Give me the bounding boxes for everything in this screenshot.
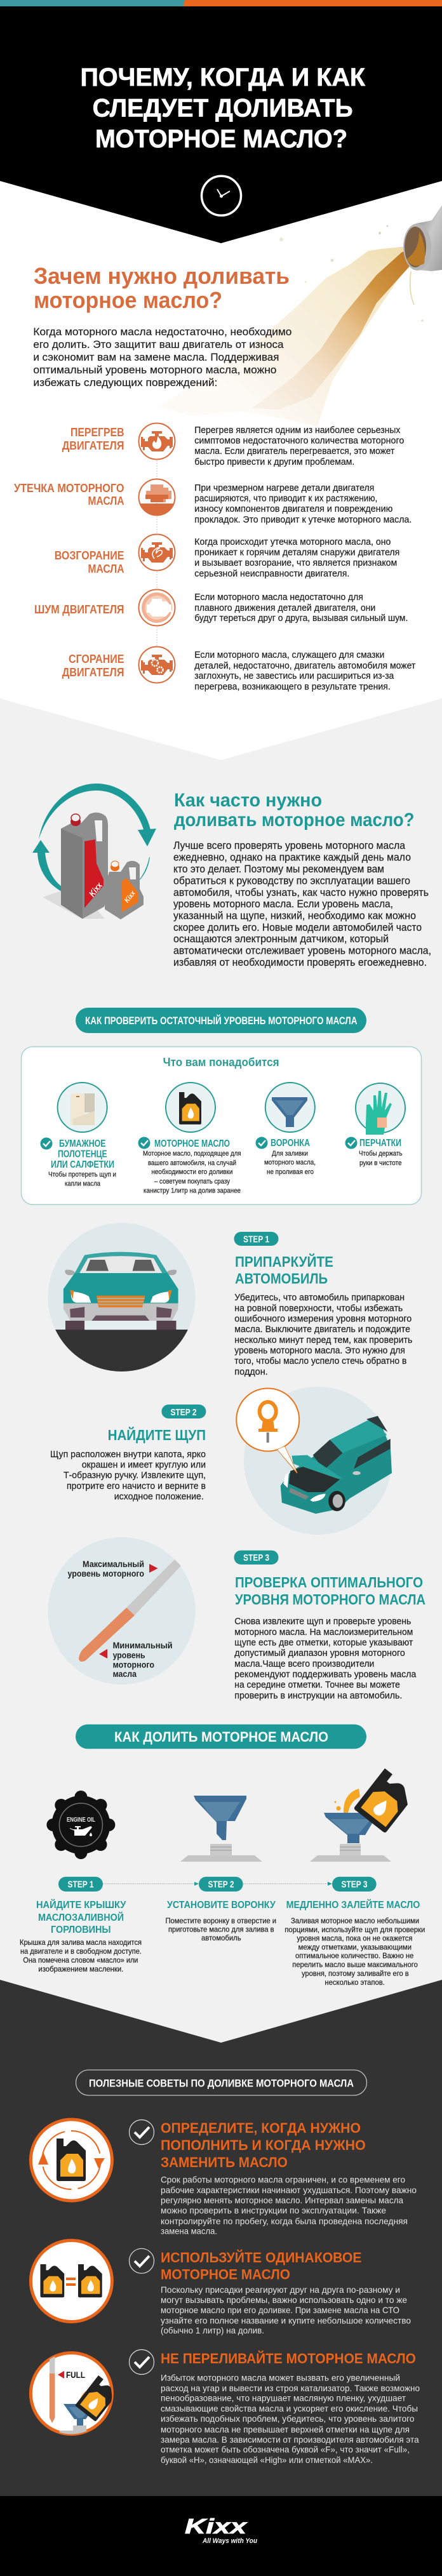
step 3: check level: ПРОВЕРКА ОПТИМАЛЬНОГО — [235, 1574, 423, 1591]
icon: two equal jugs — [30, 2240, 112, 2321]
logo: Kixx: Kixx — [185, 2514, 248, 2538]
icon: tilted oil jug — [354, 1768, 417, 1833]
intro text — [33, 326, 291, 389]
step 3: check level: на середине отметки. Точнее вы можете — [234, 1680, 400, 1690]
step 2: find dipstick: протрите его начисто и верните в — [67, 1481, 206, 1492]
damage: oil leak — [14, 479, 412, 525]
icon: funnel — [265, 1083, 315, 1132]
icon: glove — [356, 1083, 405, 1135]
item: funnel: ВОРОНКА — [271, 1138, 310, 1149]
damage: overheating: ПЕРЕГРЕВ — [70, 426, 124, 439]
top-up step 3 text — [285, 1899, 425, 1987]
damage list connector — [156, 460, 157, 646]
step 3: check level: моторного масла. На маслоизмерительном — [234, 1627, 413, 1638]
icon: noisy engine — [138, 589, 175, 626]
step 1: park: уровень моторного масла. Это нужно для — [234, 1346, 405, 1356]
tip 1: можно проверить в инструкции по эксплуатации. Также — [161, 2205, 386, 2215]
damage: oil ignition: ВОЗГОРАНИЕ — [55, 549, 124, 562]
top-up step 3 text: МЕДЛЕННО ЗАЛЕЙТЕ МАСЛО — [286, 1899, 420, 1911]
item: paper towel: ИЛИ САЛФЕТКИ — [51, 1159, 114, 1170]
step 1: park: того, чтобы масло успело стечь обратно в — [234, 1356, 407, 1366]
icon: paper towel — [58, 1083, 107, 1132]
title: ПОЧЕМУ, КОГДА И КАК — [80, 63, 366, 91]
damage: engine burnout: ДВИГАТЕЛЯ — [62, 666, 124, 679]
heading: why top up: Зачем нужно доливать — [34, 263, 290, 289]
heading: how often: Как часто нужно — [174, 790, 322, 811]
item: paper towel: ПОЛОТЕНЦЕ — [58, 1149, 107, 1159]
big red bottle — [61, 813, 108, 919]
intro text: Когда моторного масла недостаточно, необходимо — [33, 326, 291, 338]
oil pouring from bottle — [159, 205, 442, 427]
step badge: STEP 3 — [243, 1552, 269, 1563]
header banner — [0, 6, 442, 243]
how often text: ежедневно, однако на практике каждый день мало — [173, 852, 411, 864]
top-up step badges: STEP 2 — [208, 1879, 234, 1890]
how often text: автоматически отслеживает уровень моторного масла, — [173, 945, 431, 956]
top-up step 1 text: Она помечена словом «масло» или — [23, 1956, 138, 1965]
title: СЛЕДУЕТ ДОЛИВАТЬ — [93, 94, 353, 122]
step 3: check level: рекомендуют поддерживать уровень масла — [234, 1670, 417, 1680]
dark tips section background — [0, 1980, 442, 2496]
icon: dipstick and pouring: FULL — [66, 2370, 85, 2380]
illustration: funnel above filler neck — [180, 1796, 262, 1862]
step 3: check level: Снова извлеките щуп и проверьте уровень — [234, 1617, 411, 1627]
top-up step 3 text: уровня, поэтому заливайте его в — [302, 1969, 409, 1978]
tip 2: (обычно 1 литр) на долив. — [161, 2325, 264, 2335]
tip 3: избежать подобных проблем, убедитесь, что уровень залитого — [161, 2413, 415, 2424]
damage: engine burnout: Если моторного масла, служащего для смазки — [194, 650, 384, 660]
item: funnel: Для заливки — [272, 1150, 308, 1158]
item: paper towel: капли масла — [65, 1180, 101, 1188]
step 1: park: масла. Выключите двигатель и подождите — [234, 1325, 410, 1335]
icon: leaking engine — [138, 479, 175, 516]
tip 3: смазывающие свойства масла и ускоряет его окисление. Чтобы — [161, 2403, 418, 2413]
section pill: useful tips — [76, 2070, 367, 2095]
heading: why top up — [34, 263, 290, 313]
logo: Kixx — [185, 2514, 257, 2545]
tip 3: буквой «H», означающей «High» или отметкой «MAX». — [161, 2455, 373, 2465]
step badge — [234, 1551, 278, 1565]
step 3: check level — [48, 1537, 425, 1701]
step 1: park: ПРИПАРКУЙТЕ — [235, 1253, 333, 1270]
tip 3: отметка может быть обозначена буквой «F», что значит «Full», — [161, 2445, 410, 2455]
top-up step badges — [58, 1877, 377, 1892]
icon: jug with cycle arrows — [30, 2119, 112, 2201]
heading: why top up: моторное масло? — [34, 287, 222, 313]
tip 1: ЗАМЕНИТЬ МАСЛО — [161, 2154, 288, 2170]
damage: oil ignition: МАСЛА — [88, 563, 124, 575]
section pill: how to check level — [76, 1008, 366, 1033]
illustration: dipstick levels: Максимальный — [83, 1559, 144, 1569]
tip 1: ПОПОЛНИТЬ И КОГДА НУЖНО — [161, 2137, 366, 2153]
intro text: его долить. Это защитит ваш двигатель от износа — [33, 338, 284, 350]
damage: engine noise: ШУМ ДВИГАТЕЛЯ — [34, 603, 124, 616]
tip 1: регулярно менять моторное масло. Интервал замены масла — [161, 2195, 403, 2205]
how often text: кто это делает. Поэтому мы рекомендуем вам — [173, 864, 384, 875]
grey section background — [0, 698, 442, 2043]
cycle arrows — [32, 784, 156, 891]
icon: check — [130, 2248, 154, 2273]
top-up step 1 text: НАЙДИТЕ КРЫШКУ — [36, 1899, 126, 1911]
tip 2: узнайте его полное название и купите небольшое количество — [161, 2316, 411, 2326]
damage: oil ignition: проникает к горячим деталям снаружи двигателя — [194, 547, 399, 557]
icon: check — [130, 2349, 154, 2375]
item: gloves: Чтобы держать — [359, 1150, 403, 1158]
section pill: how to top up — [76, 1725, 366, 1749]
tip 2 — [30, 2240, 411, 2335]
item: funnel: моторного масла, — [264, 1159, 316, 1166]
top-up step 2 text: УСТАНОВИТЕ ВОРОНКУ — [167, 1900, 276, 1911]
damage: oil leak: УТЕЧКА МОТОРНОГО — [14, 482, 124, 495]
top-up step 1 text: на двигателе и в свободном доступе. — [20, 1947, 142, 1956]
tip 3: пенообразование, что нарушает масляную пленку, ухудшает — [161, 2393, 406, 2403]
how often text — [173, 840, 431, 968]
item: engine oil: МОТОРНОЕ МАСЛО — [154, 1138, 230, 1149]
damage: oil leak: При чрезмерном нагреве детали двигателя — [194, 483, 374, 493]
how often text: оснащаются электронным датчиком, который — [173, 933, 389, 945]
item: engine oil: Моторное масло, подходящее для — [143, 1150, 241, 1158]
illustration: car front — [44, 1223, 197, 1374]
illustration: dipstick levels: уровень — [113, 1651, 145, 1660]
step 2: find dipstick: НАЙДИТЕ ЩУП — [108, 1426, 206, 1443]
tip 2: Поскольку присадки реагируют друг на друга по-разному и — [161, 2285, 400, 2295]
illustration: dipstick levels — [48, 1537, 196, 1685]
illustration: pouring oil into funnel — [310, 1768, 417, 1862]
icon: oil filler cap: ENGINE OIL — [67, 1817, 95, 1824]
top-up step 1 text: МАСЛОЗАЛИВНОЙ — [38, 1912, 124, 1923]
step 2: find dipstick: окрашен и имеет круглую или — [82, 1460, 206, 1471]
how often text: указанный на щупе, низкий, необходимо как можно — [173, 911, 416, 922]
top-up step 1 text: изображением масленки. — [38, 1965, 123, 1973]
item: gloves — [345, 1083, 405, 1167]
step 3: check level: допустимый диапазон уровня моторного — [234, 1648, 405, 1658]
top-up step 1 text: ГОРЛОВИНЫ — [51, 1925, 110, 1935]
damage: engine noise — [34, 589, 408, 626]
callout: dipstick handle — [236, 1388, 299, 1473]
tip 1: Срок работы моторного масла ограничен, и со временем его — [161, 2175, 405, 2185]
step 1: park: на ровной поверхности, чтобы избежать — [234, 1304, 403, 1314]
icon: engine with oil swirl — [138, 535, 175, 570]
title — [80, 63, 366, 153]
panel: what you need: Что вам понадобится — [163, 1056, 279, 1069]
intro text: оптимальный уровень моторного масла, можно — [33, 364, 276, 376]
tip 2: ИСПОЛЬЗУЙТЕ ОДИНАКОВОЕ — [161, 2250, 362, 2266]
icon: clock — [202, 176, 241, 215]
tip 2: МОТОРНОЕ МАСЛО — [161, 2267, 290, 2282]
section pill: useful tips: ПОЛЕЗНЫЕ СОВЕТЫ ПО ДОЛИВКЕ МОТОРНОГО МАСЛА — [89, 2078, 354, 2090]
damage: engine burnout: заглохнуть, не завестись или расшириться из-за — [194, 671, 394, 681]
damage: oil leak: прокладок. Это приводит к утечке моторного масла. — [194, 515, 412, 525]
top-up step 2 text — [165, 1900, 276, 1942]
top-up step 3 text: между отметками, указывающими — [298, 1943, 412, 1952]
tip 3: моторного масла не превышает верхней отметки на щупе для — [161, 2424, 410, 2434]
damage: oil leak: расширяются, что приводит к их растяжению, — [194, 494, 377, 504]
step 1: park — [44, 1223, 412, 1377]
step 1: park: Убедитесь, что автомобиль припаркован — [234, 1293, 405, 1303]
damage: engine noise: Если моторного масла недостаточно для — [194, 592, 363, 603]
title: МОТОРНОЕ МАСЛО? — [95, 125, 347, 153]
step 2: find dipstick: Т-образную ручку. Извлеките щуп, — [64, 1471, 206, 1481]
tip 1: замена масла. — [161, 2226, 217, 2236]
item: paper towel: БУМАЖНОЕ — [59, 1138, 105, 1149]
step 1: park: ошибочного измерения уровня моторного — [234, 1314, 412, 1325]
tip 1: контролируйте по пробегу, когда была проведена последняя — [161, 2216, 408, 2226]
icon: engine with flame — [138, 423, 175, 460]
step 3: check level: проверить в инструкции на автомобиль. — [234, 1691, 402, 1701]
damage: oil ignition: серьезной неисправности двигателя. — [194, 569, 349, 579]
damage: engine burnout: деталей, недостаточно, двигатель автомобиля может — [194, 661, 416, 671]
how often text: автомобиля, чтобы узнать, как часто нужно проверять — [173, 887, 429, 898]
step 2: find dipstick: исходное положение. — [114, 1492, 204, 1502]
item: paper towel: Чтобы протереть щуп и — [48, 1171, 116, 1178]
damage: engine noise: плавного движения деталей двигателя, они — [194, 603, 375, 613]
tip 3: расход на угар и вывести из строя катализатор. Также возможно — [161, 2383, 420, 2393]
step 3: check level: масла.Чаще всего производители — [234, 1659, 374, 1669]
top-up step 3 text: перелить масло выше максимального — [292, 1960, 418, 1969]
icon: oil jug — [166, 1083, 215, 1132]
how often text: скорее долить его. Новые модели автомобилей часто — [173, 922, 422, 933]
top-up step badges: STEP 3 — [342, 1879, 367, 1890]
heading: how often — [174, 790, 414, 831]
damage: overheating: ДВИГАТЕЛЯ — [62, 439, 124, 452]
item: engine oil — [138, 1083, 241, 1195]
damage: overheating: масла. Если двигатель перегревается, это может — [194, 446, 395, 457]
step badge: STEP 1 — [243, 1234, 269, 1245]
tip 3: НЕ ПЕРЕЛИВАЙТЕ МОТОРНОЕ МАСЛО — [161, 2351, 416, 2366]
step 2: find dipstick: Щуп расположен внутри капота, ярко — [50, 1450, 206, 1460]
how often text: обратиться к руководству по эксплуатации вашего — [173, 875, 410, 886]
small orange bottle: Kixx — [123, 889, 137, 904]
damage: oil ignition: и вызывает возгорание, что является признаком — [194, 558, 397, 568]
top-up step 3 text: несколько этапов. — [325, 1978, 385, 1987]
step 1: park: несколько минут перед тем, как проверить — [234, 1335, 412, 1345]
tip 3: Избыток моторного масла может вызвать его увеличенный — [161, 2373, 400, 2383]
damage: oil ignition — [55, 535, 399, 579]
top-up step 3 text: Заливая моторное масло небольшими — [291, 1916, 419, 1925]
item: engine oil: вашего автомобиля, на случай — [148, 1159, 236, 1167]
footer — [0, 2496, 442, 2576]
icon: oil filler cap — [46, 1791, 115, 1859]
damage: oil ignition: Когда происходит утечка моторного масла, оно — [194, 537, 391, 547]
top-up step 1 text: Крышка для залива масла находится — [20, 1938, 142, 1947]
step badge — [234, 1232, 278, 1246]
top-up step 2 text: Поместите воронку в отверстие и — [165, 1916, 276, 1925]
illustration: dipstick levels: Минимальный — [113, 1641, 173, 1650]
top-up step 2 text: автомобиль — [201, 1933, 241, 1942]
top colour bar — [0, 0, 442, 7]
illustration: dipstick levels: уровень моторного — [67, 1569, 144, 1578]
item: funnel — [255, 1083, 316, 1176]
damage: engine noise: будут тереться друг о друга, вызывая сильный шум. — [194, 613, 408, 624]
step 3: check level: щупе есть две отметки, которые указывают — [234, 1638, 413, 1648]
item: paper towel — [41, 1083, 116, 1188]
illustration: dipstick levels: масла — [113, 1669, 137, 1679]
how often text: уровень моторного масла. Если уровень масла, — [173, 898, 393, 910]
item: gloves: руки в чистоте — [359, 1159, 402, 1167]
top-up step 3 text: уровня масла, пока он не окажется — [297, 1934, 412, 1943]
heading: how often: доливать моторное масло? — [174, 810, 414, 831]
illustration: dipstick levels: моторного — [113, 1660, 154, 1670]
intro text: и сэкономит вам на замене масла. Поддерживая — [33, 351, 279, 363]
step badge: STEP 2 — [170, 1407, 197, 1418]
step 1: park: поддон. — [234, 1367, 268, 1377]
damage: overheating: симптомов недостаточного количества моторного — [194, 436, 404, 446]
tip 1: ОПРЕДЕЛИТЕ, КОГДА НУЖНО — [161, 2120, 361, 2136]
item: engine oil: канистру 1литр на долив заранее — [144, 1187, 241, 1195]
damage: overheating — [62, 423, 404, 467]
item: gloves: ПЕРЧАТКИ — [359, 1138, 401, 1149]
damage: overheating: быстро привести к другим проблемам. — [194, 457, 354, 467]
illustration: car with open hood — [236, 1387, 392, 1535]
item: engine oil: – советуем покупать сразу — [154, 1178, 230, 1185]
damage: engine burnout — [62, 646, 416, 692]
item: funnel: не проливая его — [267, 1168, 314, 1176]
icon: dipstick and pouring — [30, 2353, 119, 2434]
damage: engine burnout: перегрева, возникающего в результате трения. — [194, 682, 391, 692]
panel: what you need — [22, 1046, 422, 1205]
logo: Kixx: All Ways with You — [202, 2537, 257, 2545]
damage: engine burnout: СГОРАНИЕ — [69, 653, 124, 665]
section pill: how to top up: КАК ДОЛИТЬ МОТОРНОЕ МАСЛО — [114, 1729, 328, 1745]
tip 1: рабочие характеристики начинают ухудшаться. Поэтому важно — [161, 2185, 417, 2195]
tip 1 — [30, 2119, 417, 2236]
step 2: find dipstick — [50, 1387, 392, 1535]
how often text: Лучше всего проверять уровень моторного масла — [173, 840, 406, 851]
intro text: избежать следующих повреждений: — [33, 377, 217, 389]
icon: engine with gears — [138, 646, 175, 683]
damage: overheating: Перегрев является одним из наиболее серьезных — [194, 425, 401, 436]
how often text: избавляя от необходимости проверять егоежедневно. — [173, 957, 427, 968]
step badge — [161, 1405, 206, 1418]
item: engine oil: необходимости его доливки — [151, 1168, 232, 1176]
illustration: oil bottles in cycle — [32, 784, 156, 919]
top-up step 1 text — [20, 1899, 142, 1973]
top-up step 2 text: приготовьте масло для залива в — [168, 1925, 274, 1934]
tip 3 — [30, 2349, 420, 2465]
section pill: how to check level: КАК ПРОВЕРИТЬ ОСТАТОЧНЫЙ УРОВЕНЬ МОТОРНОГО МАСЛА — [85, 1015, 358, 1027]
top-up step 3 text: порциями, используйте щуп для проверки — [285, 1925, 425, 1934]
tip 3: замера масла. В зависимости от производителя автомобиля эта — [161, 2434, 419, 2445]
tip 2: моторное масло при его доливке. При замене масла на СТО — [161, 2305, 399, 2315]
big red bottle: Kixx — [87, 880, 105, 898]
damage: oil leak: МАСЛА — [88, 495, 124, 507]
step 1: park: АВТОМОБИЛЬ — [235, 1271, 328, 1287]
damage: oil leak: износу компонентов двигателя и повреждению — [194, 504, 392, 514]
icon: check — [130, 2119, 154, 2145]
small orange bottle — [105, 861, 144, 919]
top-up step badges: STEP 1 — [67, 1879, 94, 1890]
tip 2: могут вызывать проблемы, важно использовать одно и то же — [161, 2295, 407, 2305]
top-up step 3 text: оптимальное количество. Важно не — [295, 1951, 414, 1960]
